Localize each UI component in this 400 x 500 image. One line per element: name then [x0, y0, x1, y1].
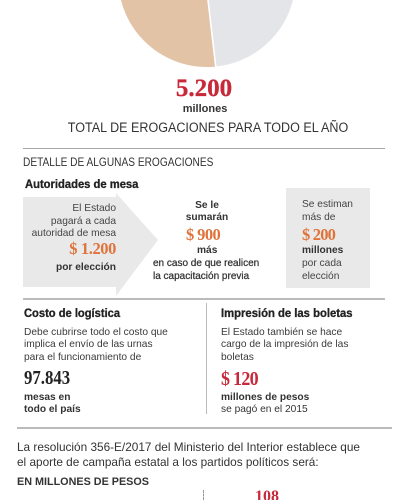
body text [221, 327, 348, 363]
caption: se pagó en el 2015 [221, 404, 308, 415]
caption: millones de pesos [221, 392, 309, 402]
se le sumaran: Se le [195, 200, 219, 210]
más: más [197, 245, 217, 256]
resolution text: el aporte de campaña estatal a los partidos políticos será: [17, 454, 319, 468]
estimate text [302, 199, 353, 223]
amount: 900: $ 900 [186, 225, 220, 244]
por cada eleccion [302, 258, 342, 282]
resolution text: La resolución 356-E/2017 del Ministerio del Interior establece que [17, 440, 360, 454]
total label: TOTAL DE EROGACIONES PARA TODO EL AÑO [68, 120, 348, 136]
pie chart [121, 0, 293, 67]
body text: El Estado también se hace [221, 327, 342, 338]
arrow text [32, 203, 116, 273]
estimate text: Se estiman [302, 199, 353, 210]
estimate text: más de [302, 212, 335, 223]
body text: para el funcionamiento de [24, 352, 141, 363]
arrow text: autoridad de mesa [32, 228, 116, 239]
millones: millones [302, 245, 343, 256]
body text: cargo de la impresión de las [221, 339, 348, 350]
millones label: millones [183, 103, 227, 115]
chart divider [203, 490, 204, 500]
body text [24, 327, 168, 363]
amount: 200: $ 200 [302, 225, 335, 244]
heading: en millones de pesos: EN MILLONES DE PESOS [17, 476, 149, 488]
panel: costo de logistica [24, 308, 168, 415]
por cada eleccion: elección [302, 271, 339, 282]
body text: implica el envío de las urnas [24, 339, 153, 350]
heading: Impresión de las boletas [221, 308, 353, 320]
se le sumaran: sumarán [186, 212, 228, 223]
body text: boletas [221, 352, 254, 363]
arrow text: El Estado [72, 203, 116, 214]
total amount: 5.200 [176, 75, 232, 102]
condition: la capacitación previa [153, 270, 249, 282]
caption [221, 392, 309, 415]
resolution text [17, 440, 360, 468]
number caption: todo el país [24, 404, 81, 415]
amount: 1.200: $ 1.200 [69, 239, 116, 258]
amount: $ 120 [221, 368, 258, 390]
number caption [24, 392, 81, 415]
condition: en caso de que realicen [153, 258, 259, 269]
panel: impresion [221, 308, 353, 415]
number: 97.843 [24, 367, 70, 389]
arrow panel [23, 193, 158, 296]
por cada eleccion: por cada [302, 258, 342, 269]
number caption: mesas en [24, 392, 70, 403]
arrow text: pagará a cada [51, 216, 116, 227]
se le sumaran [186, 200, 228, 223]
heading: Costo de logística [24, 308, 120, 320]
heading: autoridades de mesa: Autoridades de mesa [25, 179, 138, 191]
section heading: detalle: DETALLE DE ALGUNAS EROGACIONES [23, 155, 213, 169]
por elección: por elección [56, 262, 116, 273]
body text: Debe cubrirse todo el costo que [24, 327, 168, 338]
middle text [153, 200, 259, 282]
condition [153, 258, 259, 282]
panel: right box [286, 188, 370, 288]
